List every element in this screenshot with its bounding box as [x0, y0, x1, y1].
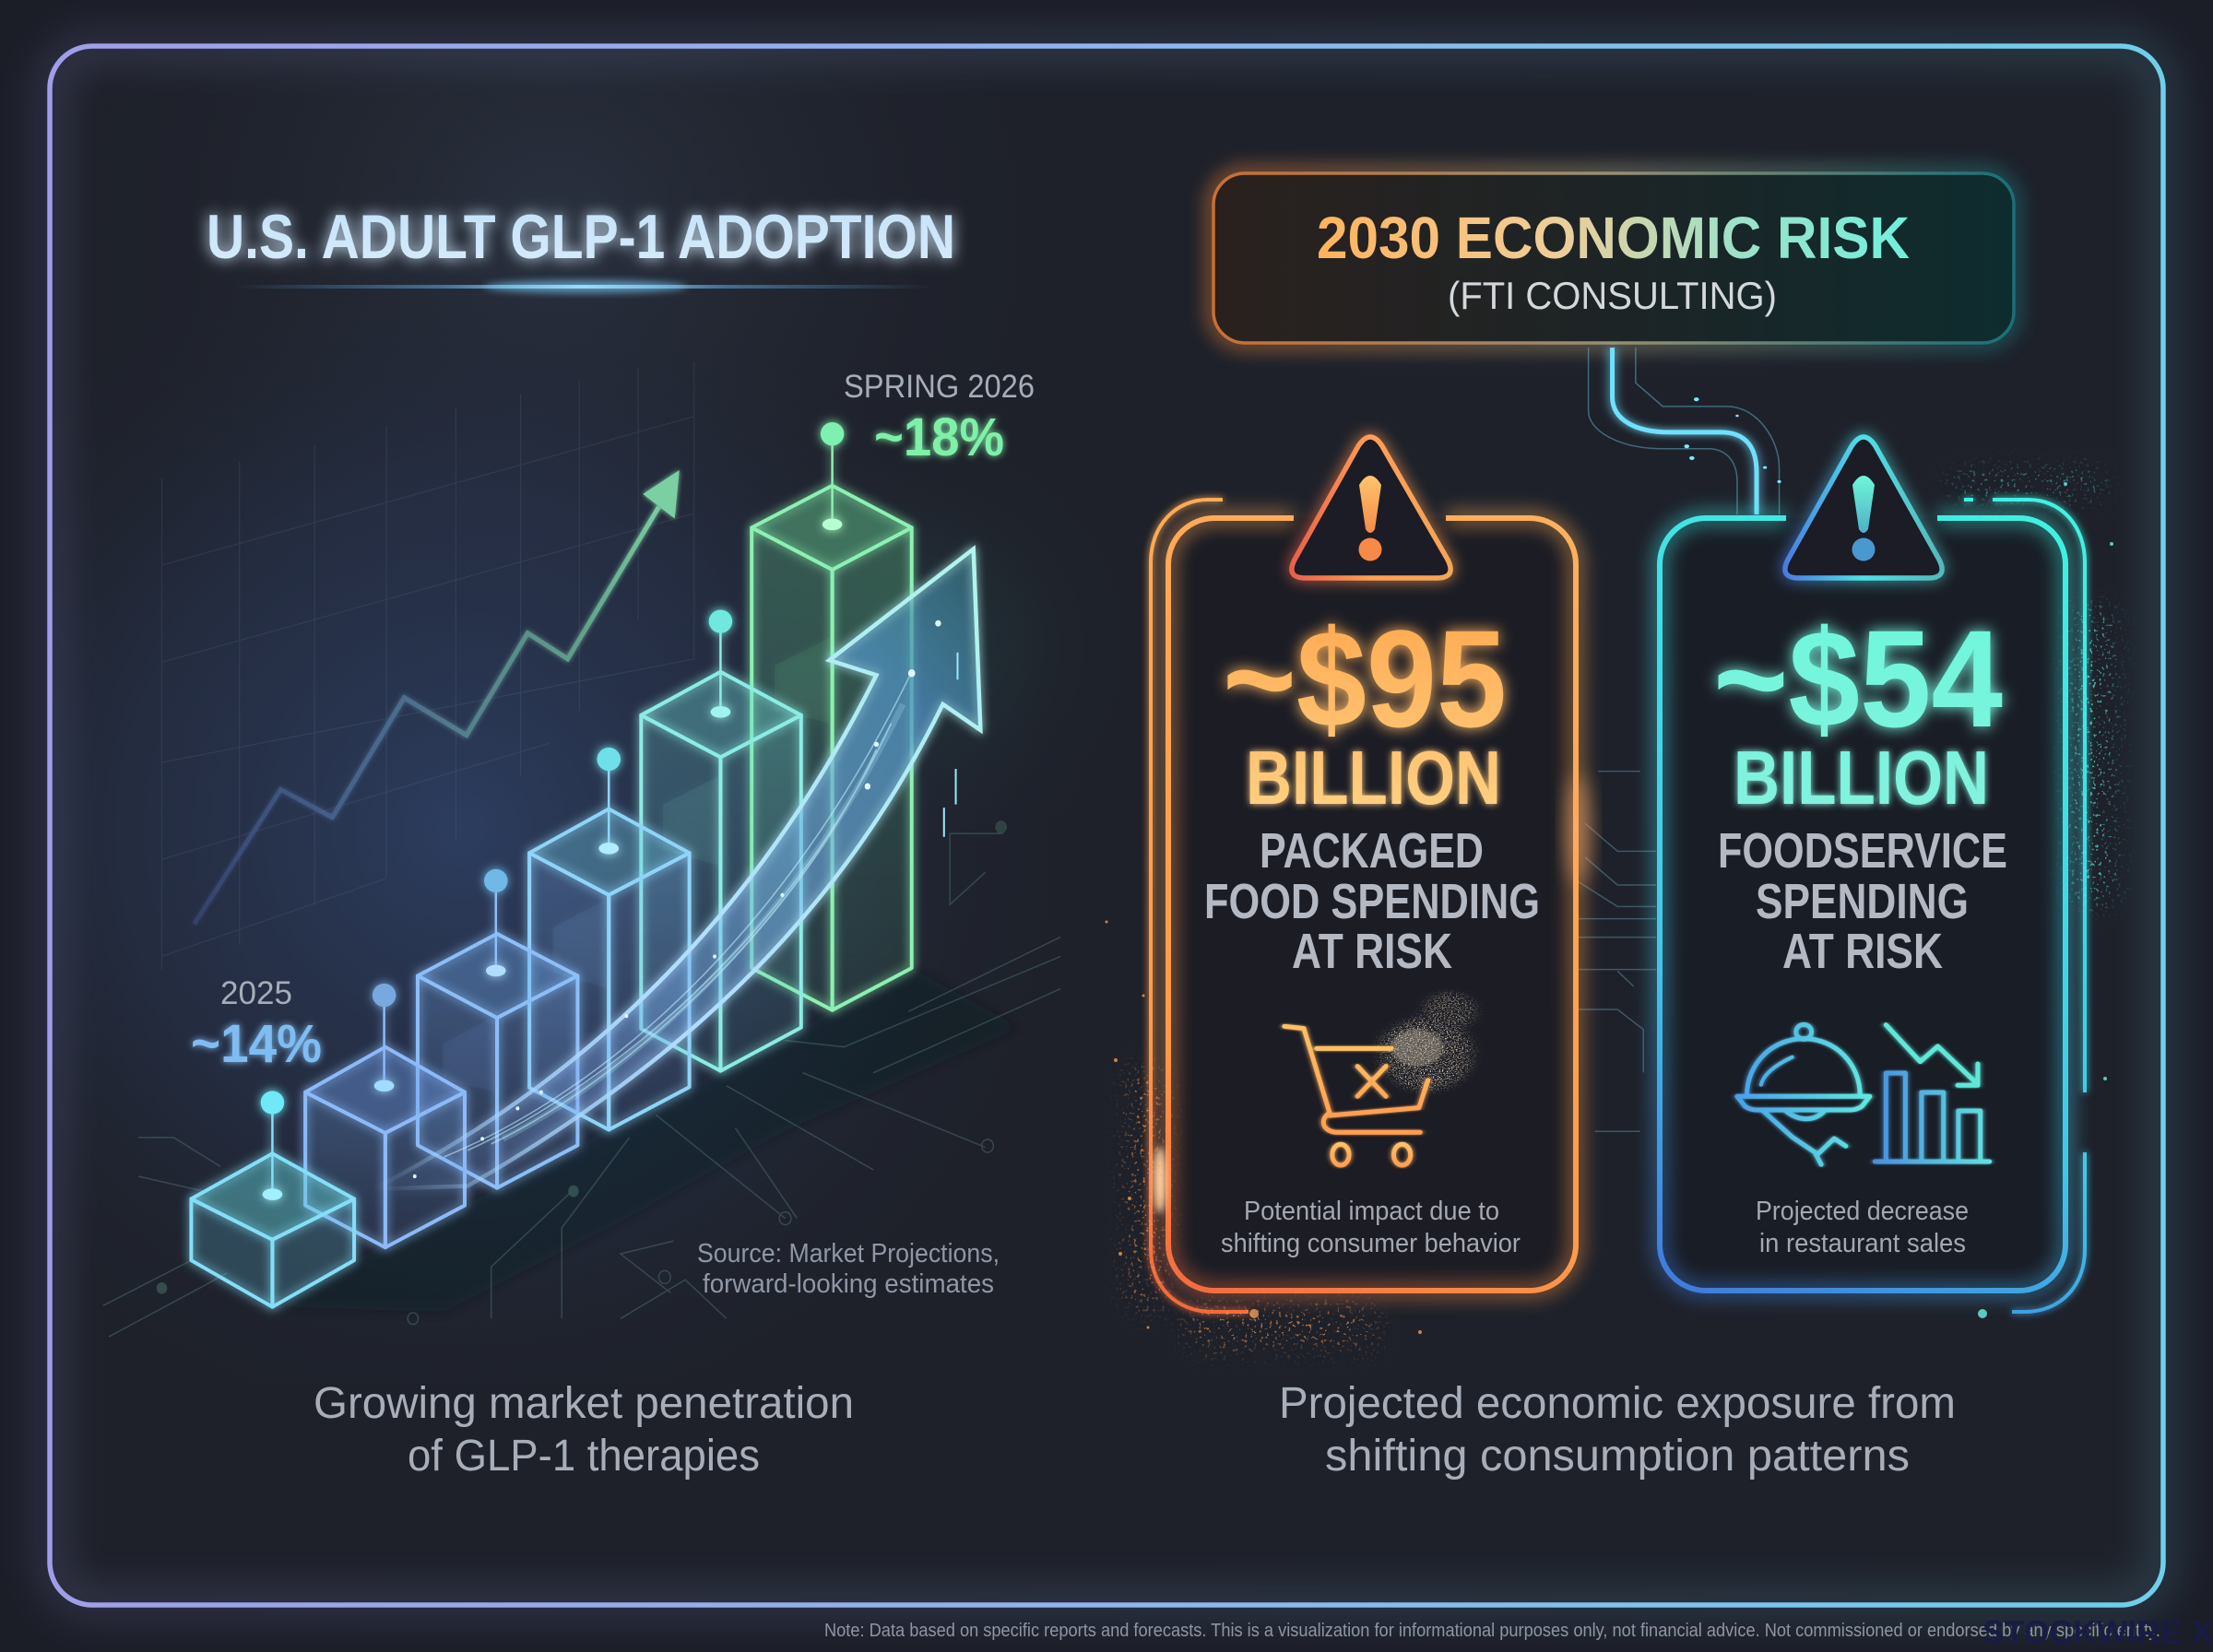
value: ~$95 — [1223, 601, 1507, 756]
icon: warning triangle — [1292, 437, 1450, 578]
unit: BILLION — [1734, 735, 1989, 820]
header title: 2030 ECONOMIC RISK — [1317, 205, 1910, 271]
right caption: shifting consumption patterns — [1325, 1432, 1910, 1481]
value: ~$54 — [1713, 601, 2003, 756]
unit: BILLION — [1246, 735, 1501, 820]
card frame — [1660, 500, 2085, 1312]
growth arrow — [373, 549, 980, 1189]
label: AT RISK — [1782, 924, 1943, 979]
panel: economic risk header — [1213, 173, 2014, 343]
title: U.S. ADULT GLP-1 ADOPTION — [207, 202, 955, 272]
left caption: Growing market penetration — [314, 1379, 854, 1428]
bar 2 — [305, 984, 465, 1247]
left caption — [314, 1379, 854, 1481]
label — [1204, 823, 1540, 979]
right caption: Projected economic exposure from — [1279, 1379, 1956, 1428]
icon: cloche and falling bars — [1737, 1024, 1990, 1164]
caption: shifting consumer behavior — [1221, 1229, 1521, 1258]
source note — [697, 1239, 1000, 1299]
card frame — [1151, 500, 1592, 1312]
left panel ambient glow — [52, 48, 1143, 1603]
title underline — [233, 280, 931, 293]
panel: adoption chart — [103, 361, 1060, 1337]
caption: Potential impact due to — [1244, 1197, 1499, 1226]
label: FOODSERVICE — [1718, 823, 2007, 879]
caption — [1756, 1197, 1969, 1258]
label: 2025: ~14% — [191, 1014, 322, 1074]
header subtitle: (FTI CONSULTING) — [1448, 274, 1777, 317]
label: spring 2026: ~18% — [874, 407, 1004, 467]
chart grid — [162, 361, 694, 970]
icon: shopping cart — [1284, 993, 1475, 1165]
label: FOOD SPENDING — [1204, 874, 1540, 929]
panel: adoption heading — [207, 202, 955, 293]
decorative particles — [1105, 475, 2113, 1346]
label: PACKAGED — [1260, 823, 1484, 879]
icon: warning triangle — [1785, 437, 1942, 578]
caption: in restaurant sales — [1759, 1229, 1966, 1258]
caption: Projected decrease — [1756, 1197, 1969, 1226]
circuit traces — [103, 820, 1060, 1337]
label: spring 2026: SPRING 2026 — [844, 369, 1035, 405]
bar 3 — [418, 869, 577, 1188]
ground shadows — [272, 968, 1021, 1312]
background trend line — [195, 470, 680, 924]
label: 2025: 2025 — [220, 975, 292, 1011]
watermark: STOCKWIRE X — [1982, 1613, 2213, 1651]
right caption — [1279, 1379, 1956, 1481]
label — [1718, 823, 2007, 979]
source note: Source: Market Projections, — [697, 1239, 1000, 1268]
label: SPENDING — [1756, 874, 1969, 929]
mid circuit decorations — [1579, 772, 1656, 1131]
bar 4 — [529, 748, 690, 1129]
card: foodservice — [1660, 437, 2085, 1312]
card: packaged food — [1151, 437, 1592, 1312]
connector between header and teal card — [1589, 348, 1781, 514]
bar 5 — [641, 609, 801, 1071]
label: spring 2026 — [844, 369, 1035, 467]
label: AT RISK — [1292, 924, 1452, 979]
left caption: of GLP-1 therapies — [408, 1432, 760, 1481]
label: 2025 — [191, 975, 322, 1074]
caption — [1221, 1197, 1521, 1258]
bar 1: 2025 — [191, 1091, 354, 1307]
source note: forward-looking estimates — [703, 1269, 994, 1299]
bar 6: spring 2026 — [751, 422, 912, 1010]
